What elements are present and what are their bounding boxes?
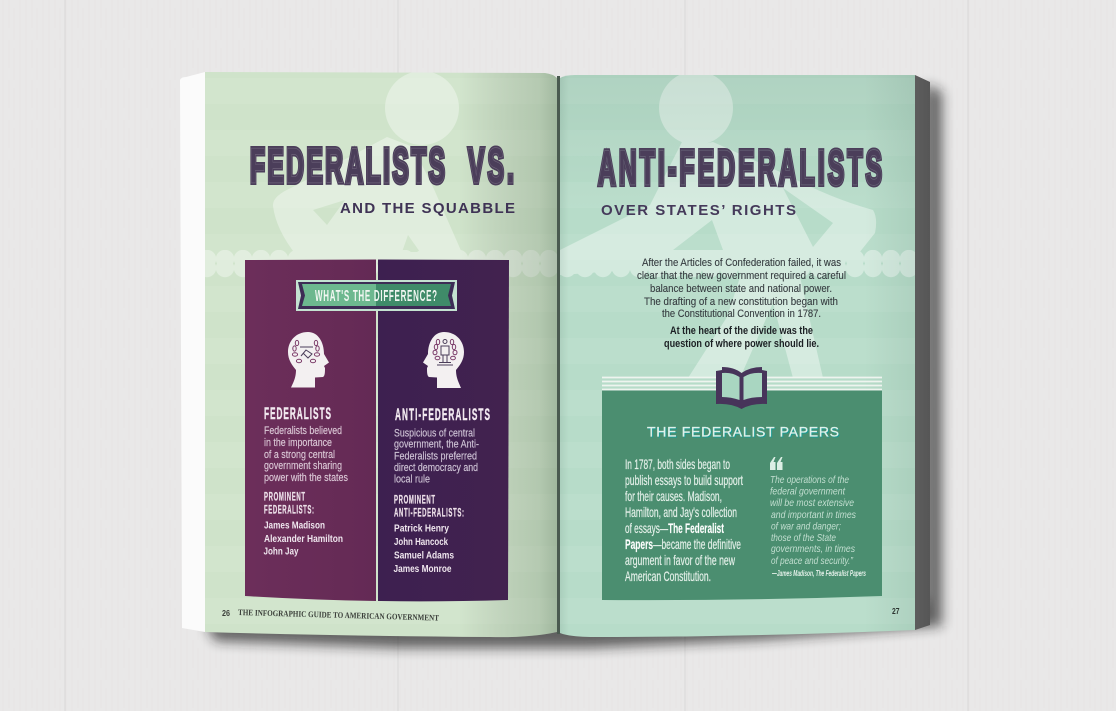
pull quote: of peace and security.” [771,555,853,567]
description: government sharing [264,460,342,472]
heading: the federalist papers: THE FEDERALIST PAPERS [648,424,840,440]
heading: the federalist papers: THE FEDERALIST PAPERS [647,424,839,440]
text block: federalists [264,404,348,558]
description: government, the Anti- [394,438,479,450]
silhouette: left figure [205,71,557,278]
names [264,520,343,558]
description: power with the states [264,472,348,484]
names: James Madison [264,520,325,532]
title: Federalists vs.: FEDERALISTS [250,139,445,194]
gutter [557,76,560,634]
description: in the importance [264,437,332,449]
text block: essay summary: In 1787, both sides began to [625,456,730,472]
icon: open book [716,367,767,409]
description: direct democracy and [394,462,478,474]
names [394,524,454,575]
names: Samuel Adams [394,550,454,562]
title: Federalists vs.: FEDERALISTS [250,139,445,194]
banner: what's the difference: WHAT'S THE DIFFERENCE? [315,287,437,305]
heading: anti-federalists: ANTI-FEDERALISTS [395,405,490,424]
names: Alexander Hamilton [264,534,343,545]
text block: anti-federalists [394,405,490,575]
description [264,425,348,484]
description: Federalists believed [264,425,342,437]
text block: essay summary: of essays—The Federalist [625,520,724,536]
text block: introduction: clear that the new government required a careful [637,270,846,282]
panel: federalists column [245,260,376,601]
title: Federalists vs.: FEDERALISTS [250,139,445,194]
text block: essay summary: American Constitution. [625,568,711,584]
panel: what's the difference comparison [245,260,509,601]
heading: prominent anti-federalists [394,493,464,520]
heading: prominent anti-federalists: ANTI-FEDERALISTS: [394,506,464,520]
key statement: question of where power should lie. [664,338,819,350]
text block: introduction: After the Articles of Confederation failed, it was [642,257,841,269]
heading: prominent federalists: FEDERALISTS: [264,503,314,517]
title: Anti-Federalists: ANTI-FEDERALISTS [598,141,882,196]
heading: prominent federalists [264,490,314,517]
pull quote: governments, in times [771,543,856,555]
left page edge [180,72,205,632]
title: Anti-Federalists: ANTI-FEDERALISTS [598,141,882,196]
icon: federalist head with handshake [288,332,329,388]
pull quote: and important in times [771,509,857,521]
names: John Jay [264,546,299,558]
panel: anti-federalists column [378,260,509,601]
banner: what's the difference [296,280,457,311]
text block: essay summary [625,456,743,584]
description: Federalists preferred [394,450,477,462]
heading: federalists: FEDERALISTS [264,404,331,423]
page number 27: 27 [892,607,900,616]
title: Federalists vs.: VS. [468,139,514,194]
right page block edge [915,75,930,630]
text block: introduction [637,257,846,350]
panel: right page [558,70,918,640]
key statement [664,325,819,350]
pull quote: federal government [770,486,846,498]
key statement: At the heart of the divide was the [670,325,813,337]
title: Federalists vs.: VS. [468,139,514,194]
heading: prominent anti-federalists: PROMINENT [394,493,435,507]
pull quote: those of the State [771,532,836,544]
footer: left page [222,607,439,623]
book shadow [205,84,942,648]
subtitle: and the squabble: AND THE SQUABBLE [340,200,515,217]
text block: introduction: The drafting of a new constitution began with [644,296,838,308]
silhouette: right figure [560,71,916,378]
subtitle: over states' rights: OVER STATES’ RIGHTS [601,202,796,219]
panel: left page [205,70,557,640]
pull quote [770,474,857,567]
text block: introduction: balance between state and national power. [650,283,832,295]
text block: essay summary: Papers—became the definitive [625,536,741,552]
description [394,428,479,486]
text block: introduction: the Constitutional Convention in 1787. [662,308,821,320]
text block: essay summary: Hamilton, and Jay's collection [625,504,737,520]
panel: the federalist papers [602,367,882,600]
description: Suspicious of central [394,428,475,440]
description: of a strong central [264,449,335,461]
names: Patrick Henry [394,524,449,534]
icon: quotation mark [770,457,782,470]
running title: THE INFOGRAPHIC GUIDE TO AMERICAN GOVERNMENT [238,607,439,623]
heading: prominent federalists: PROMINENT [264,490,305,504]
names: James Monroe [394,564,452,575]
page number 26: 26 [222,609,230,618]
quote attribution: —James Madison, The Federalist Papers [771,569,866,578]
icon: anti-federalist head with statue [423,332,464,388]
text block: essay summary: publish essays to build support [625,472,743,488]
title: Federalists vs.: VS. [468,139,514,194]
description: local rule [394,474,430,486]
text block: essay summary: argument in favor of the new [625,552,736,568]
text block: essay summary: for their causes. Madison, [625,488,722,504]
pull quote: of war and danger; [771,520,841,532]
pull quote: The operations of the [770,474,849,486]
book: open spread [180,70,930,640]
title: Anti-Federalists: ANTI-FEDERALISTS [598,141,882,196]
names: John Hancock [394,537,448,548]
pull quote: will be most extensive [770,497,854,509]
